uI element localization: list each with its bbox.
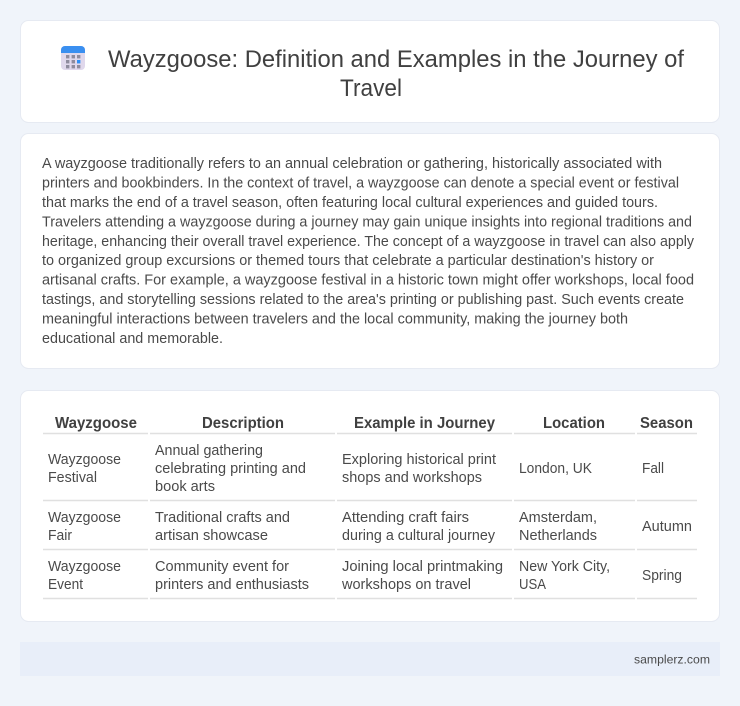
table row: Wayzgoose Festival: book arts	[155, 479, 215, 495]
panel: title card	[20, 20, 720, 122]
table row: Wayzgoose Event: Event	[48, 577, 83, 593]
table row: Wayzgoose Festival: Exploring historical print	[342, 452, 496, 468]
table row: Wayzgoose Festival: Annual gathering	[155, 443, 263, 459]
title: Wayzgoose: Definition and Examples in the Journey of	[108, 46, 684, 73]
table row: Wayzgoose Fair: artisan showcase	[155, 528, 268, 544]
panel: description text: A wayzgoose traditionally refers to an annual celebration or gathering, historically associated with	[42, 156, 662, 172]
panel: table	[20, 390, 720, 622]
title: Travel	[340, 75, 402, 102]
table row: Wayzgoose Fair: Attending craft fairs	[342, 510, 469, 526]
table row: Wayzgoose Fair	[43, 510, 697, 550]
panel: description text	[20, 134, 720, 368]
table row: Wayzgoose Festival: shops and workshops	[342, 470, 482, 486]
table row: Wayzgoose Event: Wayzgoose	[48, 559, 121, 575]
panel: description text: to organized group excursions or themed tours that celebrate a particular destination's history or	[42, 253, 654, 269]
table row: Wayzgoose Event: printers and enthusiasts	[155, 577, 309, 593]
table row: Wayzgoose Festival: London, UK	[519, 461, 592, 477]
table row: Wayzgoose Festival	[43, 443, 697, 500]
table row: Wayzgoose Fair: Netherlands	[519, 528, 597, 544]
table row: Wayzgoose Event: Community event for	[155, 559, 289, 575]
table header: Season	[640, 415, 693, 432]
table row: Wayzgoose Festival: Fall	[642, 461, 664, 477]
panel: description text: that marks the end of a travel season, often featuring local cultural experiences and guided tours.	[42, 195, 658, 211]
table row: Wayzgoose Fair: Autumn	[642, 519, 692, 535]
panel: description text: tastings, and storytelling sessions related to the area's printing or publishing past. Such events create	[42, 292, 684, 308]
panel: description text: Travelers attending a wayzgoose during a journey may gain unique insights into regional traditions and	[42, 214, 692, 230]
table row: Wayzgoose Festival: Festival	[48, 470, 97, 486]
panel: description text: artisanal crafts. For example, a wayzgoose festival in a historic town might offer workshops, local food	[42, 273, 694, 289]
title	[108, 46, 684, 102]
table header: Description	[202, 415, 284, 432]
table header	[43, 415, 697, 434]
table header: Location	[543, 415, 605, 432]
table header: Wayzgoose	[55, 415, 137, 432]
table row: Wayzgoose Festival: celebrating printing and	[155, 461, 306, 477]
table row: Wayzgoose Event: Joining local printmaking	[342, 559, 503, 575]
footer bar	[20, 642, 720, 676]
table row: Wayzgoose Fair: Fair	[48, 528, 72, 544]
table header: Example in Journey	[354, 415, 495, 432]
table row: Wayzgoose Event: New York City,	[519, 559, 610, 575]
icon: calendar	[61, 46, 85, 70]
table row: Wayzgoose Event: Spring	[642, 568, 682, 584]
table row: Wayzgoose Fair: Amsterdam,	[519, 510, 597, 526]
panel: description text: printers and bookbinders. In the context of travel, a wayzgoose can denote a special event or festival	[42, 175, 679, 191]
table row: Wayzgoose Fair: Wayzgoose	[48, 510, 121, 526]
footer bar: samplerz.com	[634, 652, 710, 666]
table row: Wayzgoose Event	[43, 559, 697, 598]
table row: Wayzgoose Festival: Wayzgoose	[48, 452, 121, 468]
panel: description text: educational and memorable.	[42, 331, 223, 347]
panel: description text: meaningful interactions between travelers and the local community, making the journey both	[42, 312, 628, 328]
table row: Wayzgoose Event: workshops on travel	[341, 577, 471, 593]
table row: Wayzgoose Event: USA	[519, 577, 546, 593]
table row: Wayzgoose Fair: Traditional crafts and	[155, 510, 290, 526]
panel: description text: heritage, enhancing their overall travel experience. The concept of a wayzgoose in travel can also apply	[42, 234, 695, 250]
table row: Wayzgoose Fair: during a cultural journey	[342, 528, 496, 544]
